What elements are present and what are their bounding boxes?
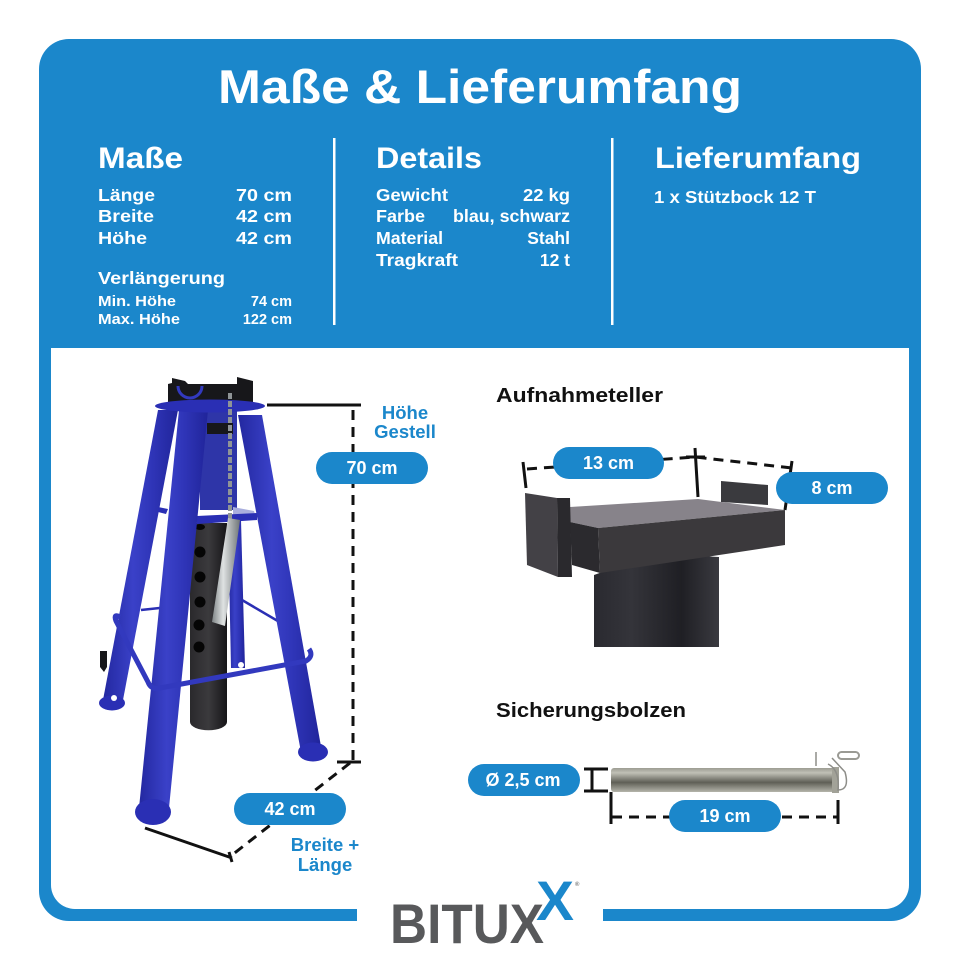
wheel clip	[100, 651, 107, 672]
photo: axle stand	[99, 377, 328, 825]
spec rows: extension: Min. Höhe	[98, 294, 176, 310]
front leg	[139, 410, 208, 808]
heading: Lieferumfang: Lieferumfang	[655, 142, 861, 175]
upper column	[200, 410, 237, 510]
back tab	[721, 481, 768, 505]
foot ring	[115, 616, 311, 688]
spec rows: extension: Max. Höhe	[98, 312, 180, 328]
pill: 13 cm: 13 cm	[583, 453, 634, 473]
plate dimension lines	[523, 448, 792, 510]
panel: Maße	[98, 142, 292, 328]
panel: Details	[376, 142, 570, 270]
shelf plate	[158, 507, 257, 524]
plate top surface	[570, 499, 785, 528]
spec rows: details: blau, schwarz	[453, 206, 570, 226]
scope of delivery item: 1 x Stützbock 12 T	[654, 187, 816, 207]
lower braces	[141, 600, 288, 627]
left leg	[103, 410, 178, 700]
label: Höhe Gestell	[374, 402, 436, 442]
pill: 8 cm	[776, 472, 888, 504]
label: Höhe Gestell: Gestell	[374, 421, 436, 442]
photo: support plate	[525, 481, 785, 647]
pill: 13 cm	[553, 447, 664, 479]
pill: 70 cm	[316, 452, 428, 484]
black lower column with holes	[190, 523, 227, 730]
cylinder	[594, 556, 719, 647]
logo: Bitux: BITUX	[390, 892, 544, 955]
panel: Lieferumfang	[654, 142, 861, 207]
label: Breite + Länge	[291, 834, 359, 875]
spec rows: details: Tragkraft	[376, 250, 458, 270]
pill: 19 cm: 19 cm	[699, 806, 751, 826]
spec rows: extension: 74 cm	[251, 294, 292, 310]
spec rows: dimensions: 42 cm	[236, 228, 292, 248]
pin length dimension	[611, 792, 838, 824]
spec rows: dimensions: Länge	[98, 185, 155, 205]
chain	[228, 393, 232, 520]
top plate	[155, 400, 265, 412]
right leg	[238, 415, 322, 752]
pill: 8 cm: 8 cm	[811, 478, 853, 498]
spec rows: details: Stahl	[527, 228, 570, 248]
spec rows: extension: 122 cm	[243, 312, 292, 328]
heading: Sicherungsbolzen: Sicherungsbolzen	[496, 700, 686, 722]
left plate front	[525, 493, 558, 577]
spec rows: extension	[98, 294, 292, 328]
pill: diameter: Ø 2,5 cm	[485, 770, 561, 790]
logo: Bitux: ®	[575, 881, 580, 888]
heading: Maße: Maße	[98, 142, 183, 175]
pill: 42 cm	[234, 793, 346, 825]
spec rows: details: Material	[376, 228, 443, 248]
heading: Aufnahmeteller: Aufnahmeteller	[496, 385, 663, 407]
spec rows: details: 22 kg	[523, 185, 570, 205]
plate side face	[570, 522, 600, 573]
spec rows: details: 12 t	[540, 250, 570, 270]
pill: 42 cm: 42 cm	[264, 799, 316, 819]
spec rows: details	[376, 185, 570, 270]
spec rows: dimensions: Breite	[98, 206, 154, 226]
spec rows: dimensions: 70 cm	[236, 185, 292, 205]
pill: 19 cm	[669, 800, 781, 832]
title: Maße & Lieferumfang	[218, 60, 742, 113]
photo: locking pin	[611, 752, 859, 793]
spec rows: details: Farbe	[376, 206, 425, 226]
back leg	[228, 520, 245, 668]
subheading: Verlängerung: Verlängerung	[98, 268, 225, 288]
height dimension line	[267, 405, 361, 762]
pin diameter dimension	[584, 769, 608, 791]
logo: Bitux	[390, 869, 580, 955]
spec rows: dimensions: Höhe	[98, 228, 147, 248]
plate front face	[598, 510, 785, 573]
left plate side	[557, 498, 572, 577]
label: Breite + Länge: Breite +	[291, 834, 359, 855]
spec rows: dimensions	[98, 185, 292, 248]
width dimension line	[145, 763, 350, 862]
spec rows: dimensions: 42 cm	[236, 206, 292, 226]
pill: diameter	[468, 764, 580, 796]
black saddle	[168, 377, 253, 402]
spec rows: details: Gewicht	[376, 185, 448, 205]
logo: Bitux: X	[536, 869, 574, 932]
heading: Details: Details	[376, 142, 482, 175]
label: Höhe Gestell: Höhe	[382, 402, 428, 423]
label: Breite + Länge: Länge	[298, 854, 352, 875]
steel pin hanging	[212, 518, 240, 626]
pill: 70 cm: 70 cm	[346, 458, 398, 478]
